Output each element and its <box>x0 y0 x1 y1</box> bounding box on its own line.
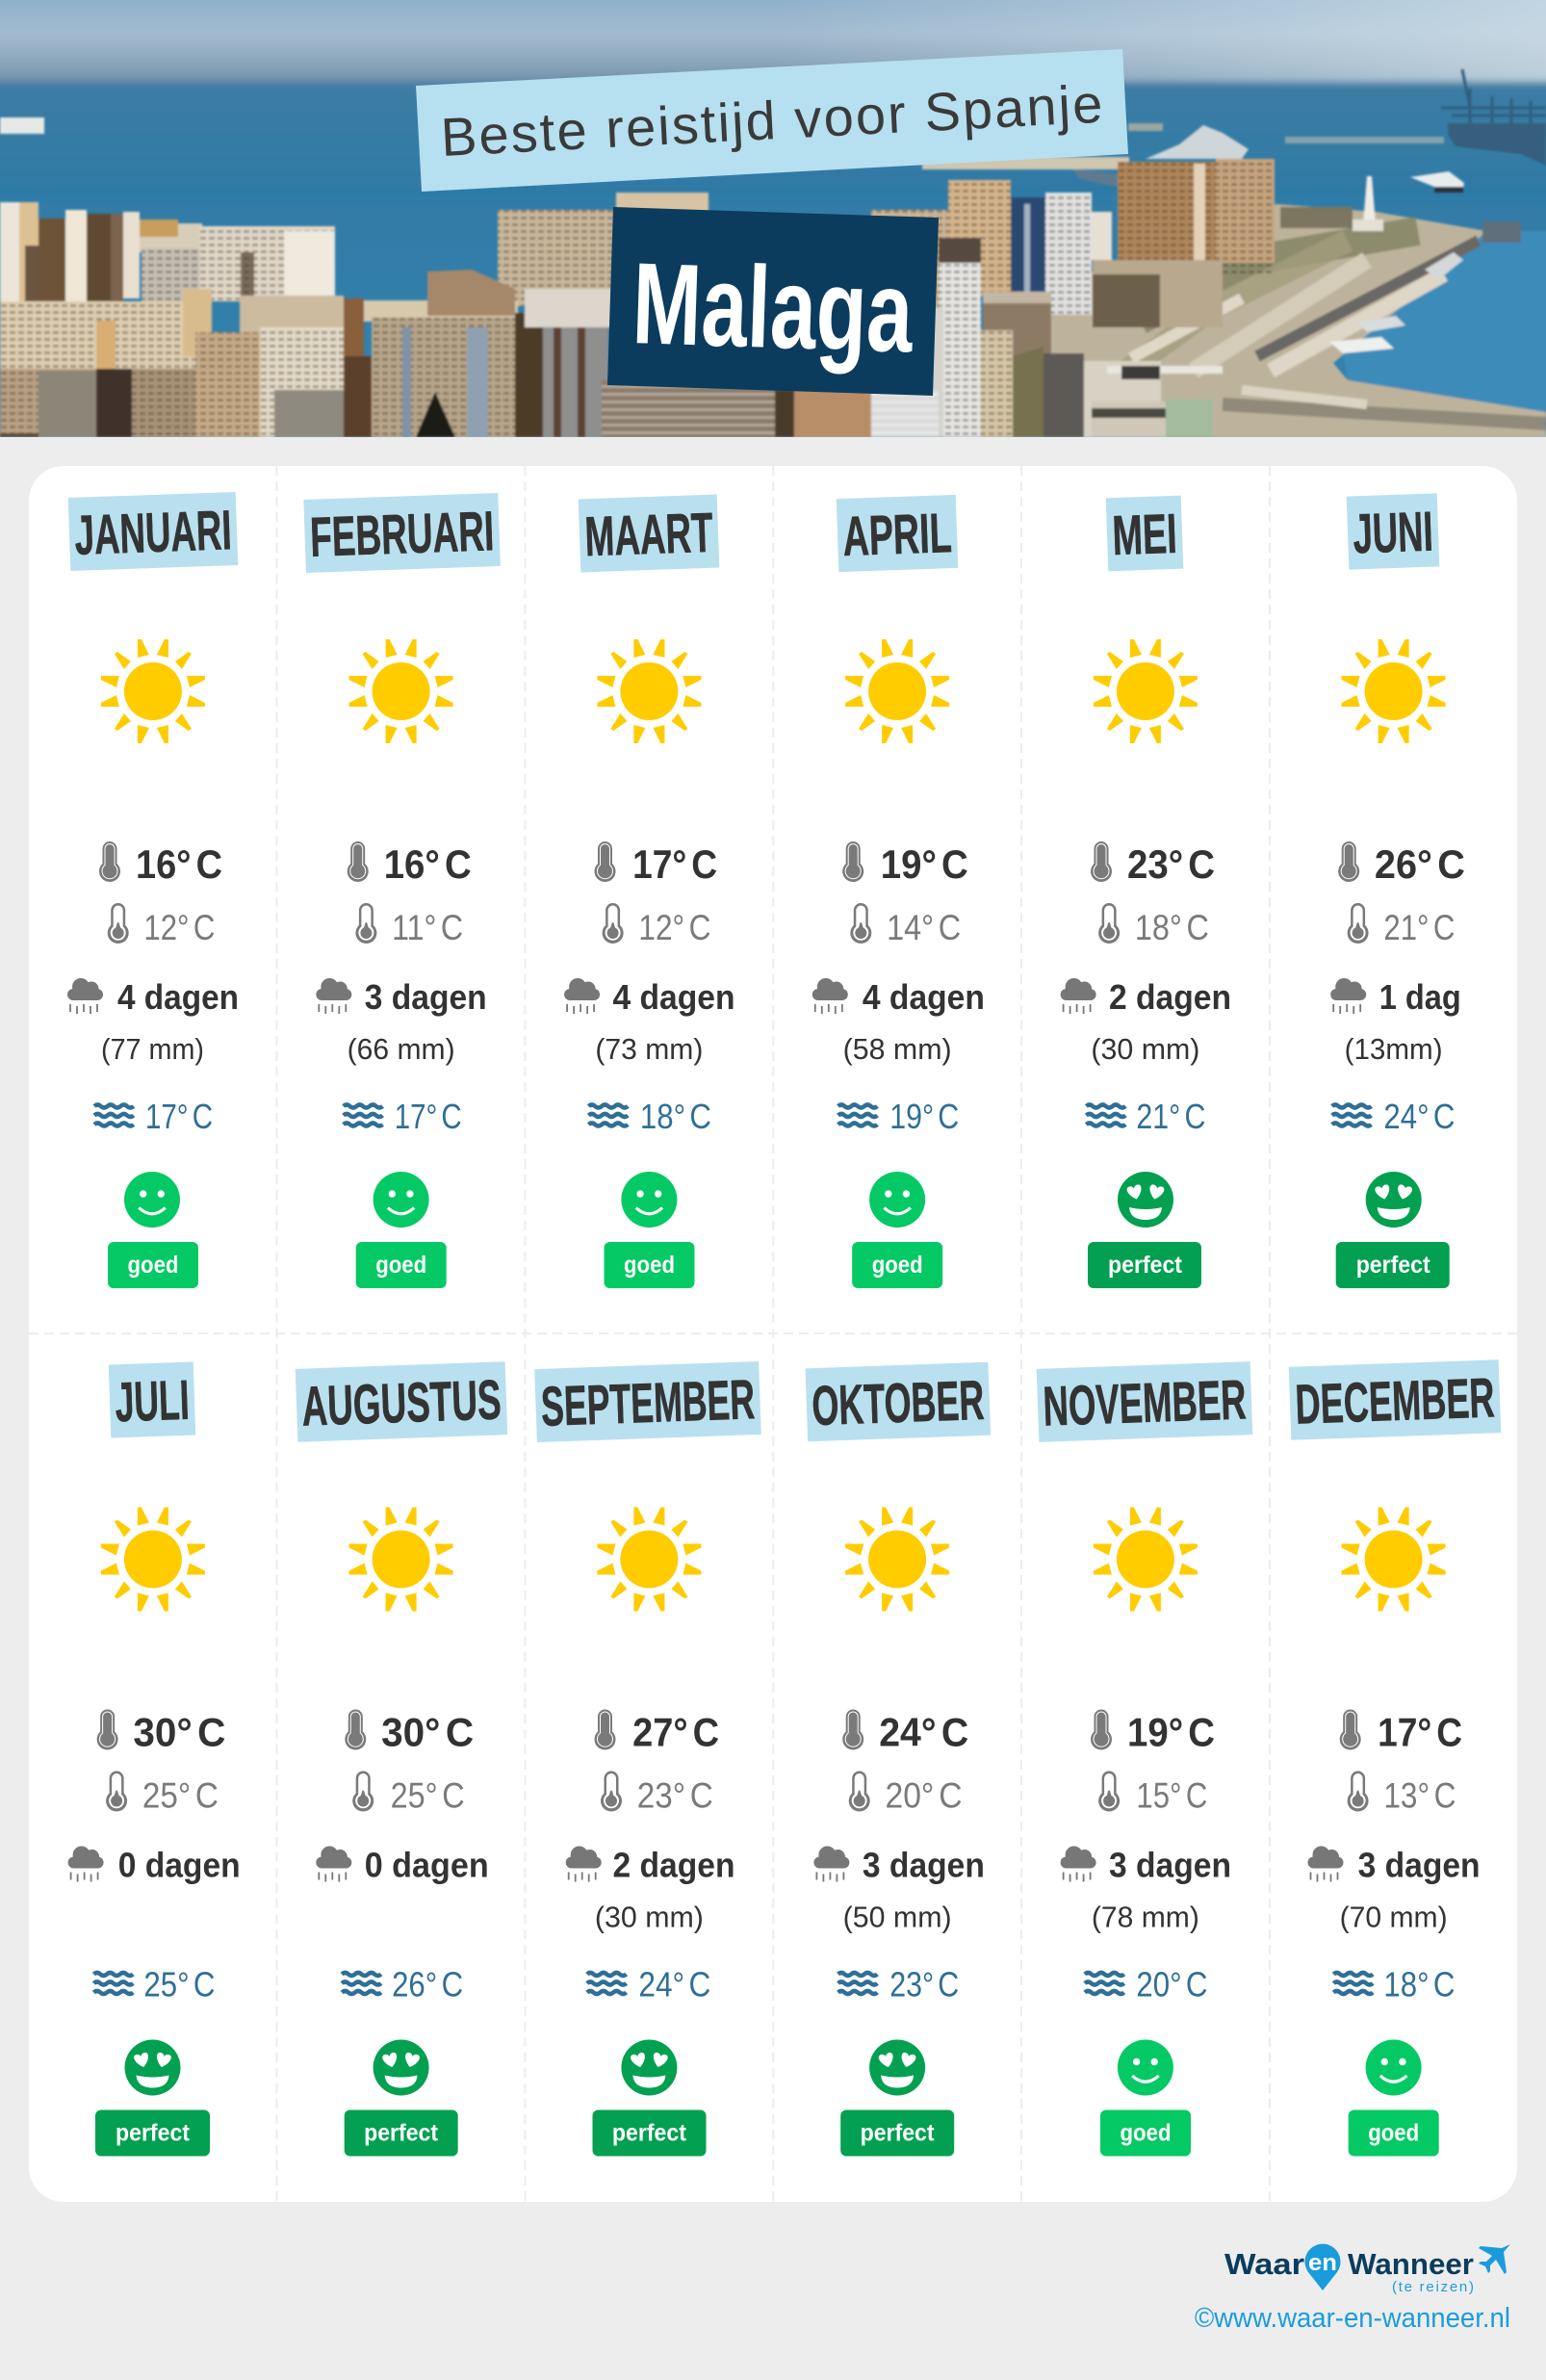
high temperature <box>842 841 968 887</box>
rainfall: (78 mm) <box>1092 1901 1199 1933</box>
water temperature <box>344 1097 462 1136</box>
below subtitle block <box>602 380 775 437</box>
month label: JULI <box>114 1369 191 1434</box>
rain days: 4 dagen <box>117 977 239 1017</box>
rain days <box>813 1845 985 1885</box>
low temperature: 20° C <box>886 1775 963 1816</box>
rain days <box>1330 977 1461 1017</box>
rain days: 3 dagen <box>863 1845 985 1885</box>
rain days: 2 dagen <box>1109 977 1231 1017</box>
water temperature <box>94 1097 213 1136</box>
icon: sun <box>1094 1508 1198 1612</box>
rating: perfect: perfect <box>1356 1252 1430 1279</box>
low temperature: 12° C <box>143 908 215 947</box>
month label <box>837 495 958 572</box>
rating: perfect <box>95 2039 210 2157</box>
rain days <box>812 977 985 1017</box>
low temperature <box>1348 903 1455 947</box>
month label <box>1037 1361 1252 1442</box>
rain days <box>67 977 239 1017</box>
rating: perfect <box>1336 1172 1450 1288</box>
subtitle banner <box>416 49 1128 192</box>
rainfall: (77 mm) <box>101 1032 204 1066</box>
rating: perfect <box>840 2039 954 2157</box>
high temperature <box>345 1710 474 1754</box>
month label: NOVEMBER <box>1042 1368 1248 1438</box>
water temperature <box>1333 1964 1455 2005</box>
panel: oktober <box>806 1362 991 2157</box>
subtitle banner: Beste reistijd voor Spanje <box>439 73 1104 168</box>
low temperature <box>1348 1772 1456 1816</box>
high temperature <box>595 1710 719 1754</box>
month label: JUNI <box>1352 501 1434 565</box>
high temperature: 16° C <box>136 841 222 887</box>
low temperature <box>355 903 463 947</box>
month label <box>1106 496 1183 571</box>
panel: mei <box>1061 496 1231 1288</box>
panel: januari <box>67 492 239 1288</box>
month label <box>68 492 238 571</box>
high temperature: 30° C <box>381 1710 474 1754</box>
rain days: 1 dag <box>1379 977 1461 1017</box>
panel: juni <box>1330 493 1465 1288</box>
month label <box>534 1361 761 1442</box>
low temperature: 23° C <box>637 1775 713 1816</box>
rainfall: (58 mm) <box>843 1032 952 1066</box>
high temperature: 17° C <box>1378 1710 1462 1754</box>
low temperature <box>352 1772 465 1816</box>
high temperature: 19° C <box>1127 1710 1215 1754</box>
low temperature: 13° C <box>1383 1775 1456 1816</box>
month label <box>579 495 719 572</box>
rain days <box>316 977 487 1017</box>
rating: goed <box>1349 2039 1439 2157</box>
rain days: 3 dagen <box>1109 1845 1231 1885</box>
water temperature <box>838 1097 959 1136</box>
low temperature: 25° C <box>142 1775 219 1816</box>
panel: maart <box>564 495 735 1288</box>
foreground white tower <box>939 263 981 437</box>
panel: september <box>534 1361 761 2157</box>
water temperature: 25° C <box>143 1964 215 2005</box>
water temperature: 17° C <box>145 1097 213 1136</box>
icon: sun <box>101 639 205 743</box>
panel: april <box>812 495 985 1288</box>
month label <box>296 1361 507 1442</box>
rating: goed <box>108 1172 198 1288</box>
rain days: 3 dagen <box>1358 1845 1481 1885</box>
rainfall: (30 mm) <box>1091 1032 1199 1066</box>
rating: perfect: perfect <box>116 2120 191 2147</box>
rainfall: (50 mm) <box>843 1901 952 1933</box>
rating: perfect: perfect <box>1108 1252 1183 1279</box>
rating: perfect: perfect <box>861 2120 935 2147</box>
high temperature: 27° C <box>632 1710 719 1754</box>
rain days: 3 dagen <box>365 977 487 1017</box>
logo: Waar en Wanneer <box>1224 2244 1510 2295</box>
month label: AUGUSTUS <box>300 1368 502 1438</box>
rain days: 0 dagen <box>365 1845 489 1885</box>
icon: sun <box>597 1508 701 1612</box>
water temperature <box>1086 1097 1205 1136</box>
rain days: 2 dagen <box>612 1845 735 1885</box>
rain days <box>1061 977 1231 1017</box>
rainfall: (66 mm) <box>348 1032 455 1066</box>
low temperature <box>108 903 215 947</box>
building behind title block <box>498 210 618 306</box>
water temperature <box>588 1097 711 1136</box>
city title banner <box>607 207 939 396</box>
high temperature <box>842 1710 968 1754</box>
high temperature: 24° C <box>879 1710 968 1754</box>
high temperature: 16° C <box>384 841 472 887</box>
month label <box>1347 493 1439 570</box>
high temperature: 23° C <box>1127 841 1215 887</box>
water temperature: 18° C <box>640 1097 711 1136</box>
rating: perfect <box>345 2039 458 2157</box>
icon: sun <box>349 1508 453 1612</box>
month label: APRIL <box>841 502 953 568</box>
logo: Waar en Wanneer: Waar <box>1224 2247 1304 2281</box>
rain days <box>1061 1845 1231 1885</box>
high temperature <box>1091 1710 1215 1754</box>
icon: sun <box>101 1508 205 1612</box>
rating: goed: goed <box>375 1252 426 1279</box>
water temperature <box>1085 1964 1207 2005</box>
rain days <box>316 1845 489 1885</box>
month label <box>109 1361 195 1438</box>
high temperature <box>1338 841 1465 887</box>
month label: SEPTEMBER <box>540 1368 756 1438</box>
water temperature: 24° C <box>1383 1097 1455 1136</box>
rating: perfect: perfect <box>612 2120 687 2147</box>
panel: augustus <box>296 1361 507 2157</box>
water temperature <box>342 1964 463 2005</box>
month label: FEBRUARI <box>309 500 495 569</box>
logo: Waar en Wanneer: (te reizen) <box>1392 2279 1474 2295</box>
rainfall: (70 mm) <box>1340 1901 1448 1933</box>
rain days: 4 dagen <box>612 977 735 1017</box>
water temperature: 26° C <box>392 1964 463 2005</box>
low temperature <box>601 1772 713 1816</box>
water temperature: 20° C <box>1136 1964 1207 2005</box>
tan towers <box>1118 162 1216 277</box>
icon: sun <box>597 639 701 743</box>
rating: goed <box>1100 2039 1191 2157</box>
icon: sun <box>1342 1508 1446 1612</box>
rain days <box>1307 1845 1481 1885</box>
panel: februari <box>303 493 501 1288</box>
low temperature <box>603 903 710 947</box>
panel: juli <box>68 1361 241 2157</box>
hero photo: Malaga skyline and harbour <box>0 0 1546 466</box>
high temperature <box>348 841 472 887</box>
rating: goed: goed <box>1368 2120 1419 2147</box>
low temperature <box>1098 1772 1207 1816</box>
rating: perfect <box>1088 1172 1201 1288</box>
low temperature: 21° C <box>1383 908 1455 947</box>
icon: sun <box>349 639 453 743</box>
rain days <box>566 1845 735 1885</box>
water temperature: 17° C <box>395 1097 462 1136</box>
month label <box>806 1362 991 1441</box>
low temperature: 18° C <box>1135 908 1209 947</box>
water temperature: 24° C <box>638 1964 710 2005</box>
icon: sun <box>845 639 949 743</box>
rainfall: (30 mm) <box>595 1901 704 1933</box>
rain days <box>68 1845 241 1885</box>
left block <box>0 202 39 303</box>
high temperature: 26° C <box>1375 841 1465 887</box>
rating: goed <box>605 1172 695 1288</box>
panel: december <box>1289 1359 1501 2157</box>
low temperature: 14° C <box>887 908 961 947</box>
low temperature <box>849 1772 963 1816</box>
city title banner: Malaga <box>631 239 915 376</box>
water temperature <box>838 1964 959 2005</box>
high temperature <box>1340 1710 1462 1754</box>
water temperature <box>587 1964 710 2005</box>
water temperature: 23° C <box>889 1964 959 2005</box>
rainfall: (13mm) <box>1345 1032 1443 1066</box>
website credit: ©www.waar-en-wanneer.nl <box>1195 2303 1510 2334</box>
rating: goed: goed <box>127 1252 179 1279</box>
high temperature <box>595 841 717 887</box>
high temperature: 30° C <box>133 1710 225 1754</box>
rating: goed <box>356 1172 447 1288</box>
rating: perfect: perfect <box>364 2120 439 2147</box>
high temperature <box>1091 841 1215 887</box>
month label <box>303 493 501 573</box>
high temperature <box>97 1710 225 1754</box>
water temperature: 21° C <box>1136 1097 1205 1136</box>
panel: monthly climate card <box>29 466 1517 2202</box>
month label: OKTOBER <box>811 1369 985 1437</box>
water temperature: 18° C <box>1383 1964 1455 2005</box>
low temperature: 15° C <box>1136 1775 1207 1816</box>
rating: perfect <box>593 2039 707 2157</box>
logo: Waar en Wanneer: Wanneer <box>1348 2247 1474 2281</box>
rain days: 4 dagen <box>863 977 985 1017</box>
rating: goed: goed <box>624 1252 675 1279</box>
rain days <box>564 977 735 1017</box>
water temperature: 19° C <box>889 1097 959 1136</box>
icon: sun <box>1094 639 1198 743</box>
high temperature: 17° C <box>632 841 717 887</box>
low temperature <box>106 1772 219 1816</box>
high temperature: 19° C <box>881 841 968 887</box>
panel: november <box>1037 1361 1252 2157</box>
icon: sun <box>1342 639 1446 743</box>
low temperature: 12° C <box>638 908 710 947</box>
rating: goed: goed <box>872 1252 923 1279</box>
beige tower <box>871 210 948 321</box>
rain days: 0 dagen <box>118 1845 241 1885</box>
white and glass tower <box>1045 193 1092 315</box>
icon: sun <box>845 1508 949 1612</box>
month label: MAART <box>583 502 714 568</box>
high temperature <box>99 841 222 887</box>
month label: JANUARI <box>73 499 233 567</box>
month label: MEI <box>1111 503 1178 567</box>
low temperature <box>850 903 961 947</box>
rating: goed <box>852 1172 942 1288</box>
rainfall: (73 mm) <box>595 1032 703 1066</box>
water temperature <box>93 1964 215 2005</box>
rating: goed: goed <box>1121 2120 1171 2147</box>
water temperature <box>1332 1097 1455 1136</box>
low temperature: 25° C <box>391 1775 465 1816</box>
logo: Waar en Wanneer: en <box>1308 2250 1337 2276</box>
low temperature <box>1098 903 1209 947</box>
low temperature: 11° C <box>392 908 463 947</box>
